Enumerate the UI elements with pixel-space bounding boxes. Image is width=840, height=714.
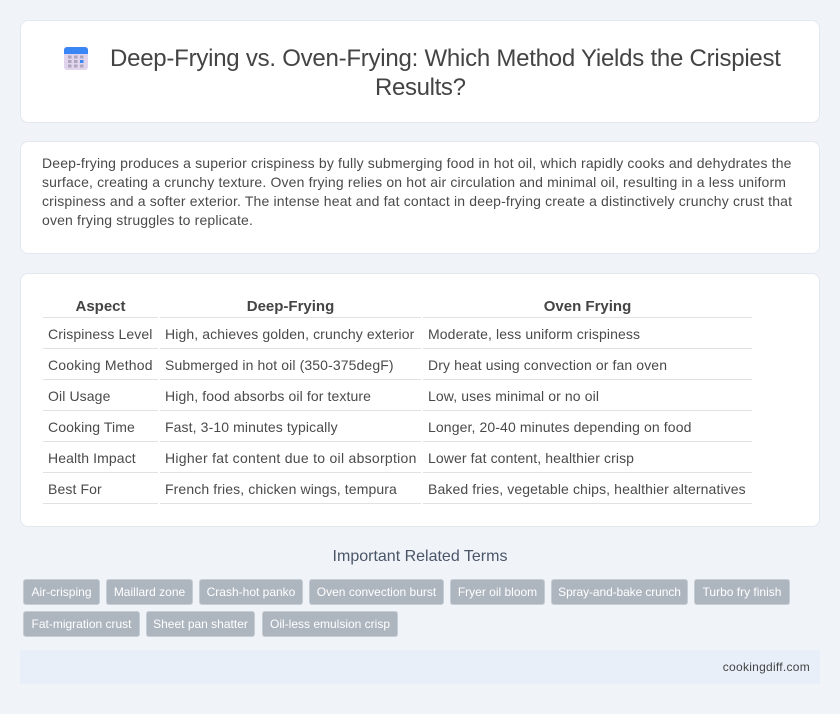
row: cooking method: Cooking Method xyxy=(48,357,153,373)
tag: Turbo fry finish xyxy=(694,579,790,605)
tag: Oven convection burst: Oven convection burst xyxy=(317,585,436,599)
table header: oven frying: Oven Frying xyxy=(544,298,631,315)
oven oil: Low, uses minimal or no oil xyxy=(428,388,599,404)
deep-frying time: Fast, 3-10 minutes typically xyxy=(165,419,338,435)
table header: aspect: Aspect xyxy=(75,298,126,315)
tag: Maillard zone xyxy=(106,579,193,605)
panel: title card xyxy=(20,20,820,123)
panel: comparison table xyxy=(20,273,820,527)
tag: Oven convection burst xyxy=(309,579,444,605)
tag: Oil-less emulsion crisp: Oil-less emulsion crisp xyxy=(270,617,390,631)
oven best for: Baked fries, vegetable chips, healthier alternatives xyxy=(428,481,746,497)
tag: Fryer oil bloom: Fryer oil bloom xyxy=(458,585,537,599)
table header: deep-frying: Deep-Frying xyxy=(247,298,334,315)
text line 4: oven frying struggles to replicate. xyxy=(42,212,253,228)
row: health impact: Health Impact xyxy=(48,450,136,466)
tag: Turbo fry finish: Turbo fry finish xyxy=(703,585,781,599)
tag: Fryer oil bloom xyxy=(450,579,545,605)
tag: Air-crisping xyxy=(23,579,100,605)
deep-frying crispiness: High, achieves golden, crunchy exterior xyxy=(165,326,414,342)
tag: Spray-and-bake crunch: Spray-and-bake crunch xyxy=(558,585,681,599)
tag: Maillard zone: Maillard zone xyxy=(114,585,185,599)
panel: intro text xyxy=(20,141,820,254)
footer source: cookingdiff.com xyxy=(723,660,810,674)
oven health: Lower fat content, healthier crisp xyxy=(428,450,634,466)
row: best for: Best For xyxy=(48,481,102,497)
deep-frying method: Submerged in hot oil (350-375degF) xyxy=(165,357,394,373)
text line 1: Deep-frying produces a superior crispiness by fully submerging food in hot oil, which rapidly cooks and dehydrates the xyxy=(42,155,792,171)
deep-frying best for: French fries, chicken wings, tempura xyxy=(165,481,397,497)
heading: related terms: Important Related Terms xyxy=(333,548,507,565)
oven time: Longer, 20-40 minutes depending on food xyxy=(428,419,692,435)
row: oil usage: Oil Usage xyxy=(48,388,110,404)
row: cooking time: Cooking Time xyxy=(48,419,135,435)
heading second line: Results? xyxy=(375,74,466,101)
tag: Spray-and-bake crunch xyxy=(551,579,688,605)
tag: Oil-less emulsion crisp xyxy=(262,611,398,637)
tag: Sheet pan shatter xyxy=(146,611,255,637)
deep-frying health: Higher fat content due to oil absorption xyxy=(165,450,417,466)
text line 3: crispiness and a softer exterior. The intense heat and fat contact in deep-frying create a distinctively crunchy crust that xyxy=(42,193,792,209)
text line 2: surface, creating a crunchy texture. Oven frying relies on hot air circulation and minimal oil, resulting in a less uniform xyxy=(42,174,786,190)
oven method: Dry heat using convection or fan oven xyxy=(428,357,667,373)
heading: Deep-Frying vs. Oven-Frying: Which Method Yields the Crispiest xyxy=(110,45,781,72)
row: crispiness level: Crispiness Level xyxy=(48,326,152,342)
icon: calendar xyxy=(64,47,88,70)
tag: Fat-migration crust xyxy=(23,611,140,637)
tag: Fat-migration crust: Fat-migration crust xyxy=(31,617,132,631)
oven crispiness: Moderate, less uniform crispiness xyxy=(428,326,640,342)
tag: Crash-hot panko: Crash-hot panko xyxy=(207,585,295,599)
deep-frying oil: High, food absorbs oil for texture xyxy=(165,388,371,404)
footer bar xyxy=(20,650,820,684)
tag: Sheet pan shatter: Sheet pan shatter xyxy=(153,617,248,631)
tag: Crash-hot panko xyxy=(199,579,303,605)
tag: Air-crisping: Air-crisping xyxy=(31,585,92,599)
